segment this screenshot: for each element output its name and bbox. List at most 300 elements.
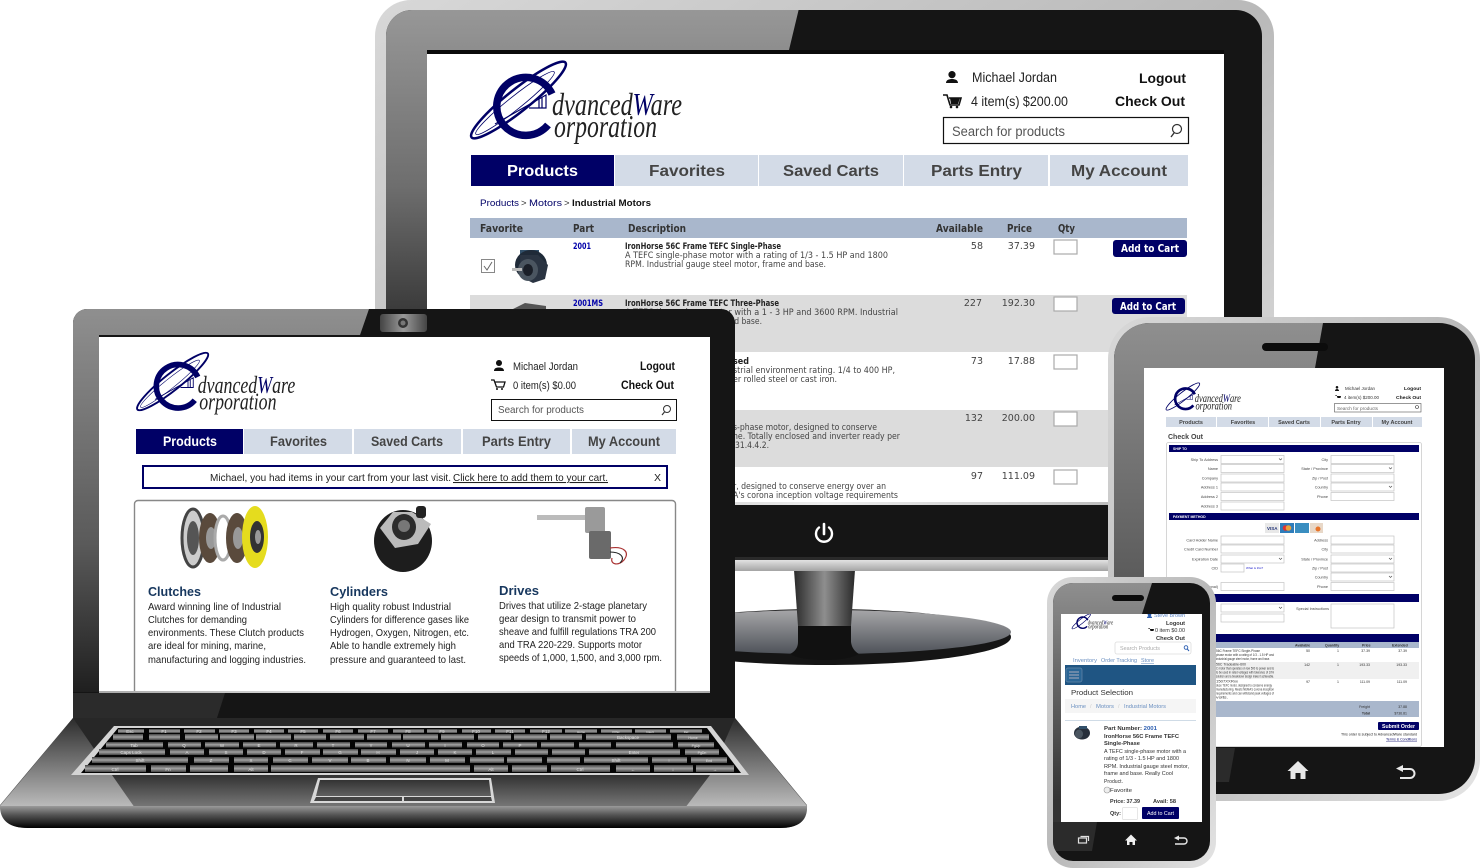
laptop base [0, 718, 807, 828]
product table: Price [1007, 223, 1032, 235]
key labels: F3 [231, 729, 237, 734]
section links: Order Tracking [1101, 658, 1137, 664]
breadcrumb: Motors [529, 198, 562, 209]
tablet [1108, 317, 1480, 801]
user account block: Check Out [1115, 93, 1185, 109]
form inputs [1221, 456, 1394, 628]
cylinder photo [374, 506, 432, 572]
order summary table: 37.39 [1361, 649, 1370, 653]
user account block [1335, 386, 1422, 400]
order summary table: 56C Frame TEFC Single-Phase [1216, 649, 1260, 653]
key labels: L [492, 750, 495, 755]
navigation tabs [1166, 417, 1422, 427]
order summary table: 1 [1337, 649, 1339, 653]
key labels: I [444, 743, 446, 748]
product table: s-phase motor, designed to conserve [733, 423, 877, 433]
order summary table: 1507XXRxx [1216, 680, 1238, 684]
category text: Drives that utilize 2-stage planetary [499, 600, 648, 612]
terms text: Terms & Conditions [1386, 738, 1417, 742]
key labels: F7 [370, 729, 376, 734]
key labels: PgDn [698, 751, 706, 755]
search box: Search for products [498, 404, 584, 416]
user account block: Logout [640, 361, 675, 373]
order summary table: Freight [1359, 705, 1370, 709]
product table: 31.4.4.2. [735, 441, 769, 451]
product table [470, 218, 1187, 501]
phone [1047, 577, 1216, 868]
navigation tabs: My Account [1071, 163, 1168, 180]
navigation tabs: Saved Carts [783, 163, 879, 180]
product table: r, designed to conserve energy over an [733, 482, 886, 492]
checkout form panel: PAYMENT METHOD [1173, 515, 1206, 519]
monitor frame [375, 0, 1274, 571]
product details: Favorite [1110, 788, 1132, 794]
category text: manufacturing and logging industries. [148, 654, 306, 666]
logo [132, 347, 296, 416]
clutch photo [182, 506, 268, 568]
icon: phone recent apps [1078, 836, 1088, 843]
product table: 200.00 [1002, 413, 1035, 424]
key labels: PgUp [692, 744, 700, 748]
categories panel [134, 500, 676, 692]
form labels: Company [1202, 476, 1218, 480]
form labels: State / Province [1301, 467, 1328, 471]
breadcrumb [1065, 699, 1196, 713]
breadcrumb: Industrial Motors [572, 198, 651, 209]
key labels: Insert [646, 730, 654, 734]
key labels: Ctrl [112, 767, 118, 772]
credit card icons [1265, 523, 1323, 533]
form labels: Special Instructions [1296, 607, 1329, 611]
product selection heading: Product Selection [1071, 688, 1133, 697]
breadcrumb: / [1118, 704, 1120, 710]
category text: Cylinders [330, 584, 388, 599]
key labels: F [301, 750, 304, 755]
search box [492, 400, 676, 420]
key labels: F8 [405, 729, 411, 734]
screen bottom highlight [427, 502, 1224, 505]
form labels: Country [1315, 486, 1328, 490]
order summary table: industrial gauge steel motor, frame and base. [1216, 657, 1270, 661]
checkout heading: Check Out [1168, 434, 1204, 441]
key labels: End [706, 759, 712, 763]
cart reminder alert: Click here to add them to your cart. [453, 472, 608, 484]
key labels: F6 [335, 729, 341, 734]
order summary table: Extended [1392, 644, 1408, 648]
form labels: State / Province [1301, 558, 1328, 562]
user account block: Steve Brown [1154, 613, 1185, 619]
quantity inputs [1054, 240, 1077, 484]
category text: and TRA 220-229. Supports motor [499, 639, 642, 651]
navigation tabs [136, 429, 676, 454]
terms text [1341, 732, 1417, 742]
product table: Qty [1058, 223, 1075, 235]
drive photo [537, 507, 626, 564]
icon: phone home [1125, 834, 1137, 845]
category text: Hydrogen, Oxygen, Nitrogen, etc. [330, 627, 469, 639]
order summary table: phase motor with a rating of 1/3 - 1.5 HP and [1216, 653, 1274, 657]
add to cart button [1142, 807, 1179, 819]
speaker slot [1262, 343, 1328, 351]
key labels: S [224, 750, 228, 755]
user account block: Check Out [621, 380, 674, 392]
form labels [1184, 458, 1329, 611]
cart reminder alert: X [654, 472, 661, 484]
motor photo [1074, 726, 1090, 740]
category text: sheave and fulfill regulations TRA 200 [499, 626, 656, 638]
order summary table: 56C Tradeable-600 [1216, 662, 1246, 666]
navigation tabs: Saved Carts [371, 433, 443, 449]
category text: gear design to transmit power to [499, 613, 636, 625]
product table: 132 [965, 413, 983, 424]
laptop [0, 309, 807, 828]
user account block: Logout [1166, 621, 1185, 627]
product table: ne. Totally enclosed and inverter ready per [733, 432, 900, 442]
breadcrumb: / [1090, 704, 1092, 710]
navigation tabs: Parts Entry [1331, 420, 1362, 426]
key labels: R [294, 743, 298, 748]
favorite checkbox [482, 260, 494, 272]
monitor [375, 0, 1274, 665]
terms text: This order is subject to AdvancedWare standard [1341, 732, 1417, 736]
product table: gauge steel motor, frame and base. [625, 317, 762, 327]
user account block: Logout [1139, 70, 1186, 86]
form labels: Zip / Post [1312, 566, 1329, 570]
navigation tabs: Products [507, 163, 578, 180]
submit order button [1378, 722, 1419, 730]
key labels: Shift [135, 758, 145, 763]
category text: Award winning line of Industrial [148, 601, 281, 613]
order summary table: 193.33 [1396, 663, 1407, 667]
breadcrumb [480, 198, 651, 209]
product table: 97 [971, 471, 983, 482]
form labels: Address 3 [1201, 504, 1218, 508]
key labels: Tab [130, 743, 138, 748]
key labels: F5 [300, 729, 306, 734]
product details: Part Number: 2001 [1104, 726, 1157, 732]
tablet screen [1144, 368, 1444, 747]
logo: dvancedWare [198, 373, 296, 399]
product table: 192.30 [1002, 298, 1035, 309]
product table: 58 [971, 241, 983, 252]
icon: phone back [1174, 836, 1187, 844]
order summary table: 1 [1337, 680, 1339, 684]
key labels: F9 [439, 729, 445, 734]
phone frame [1047, 577, 1216, 868]
form labels: City [1321, 458, 1328, 462]
form labels: Expiration Date [1192, 558, 1218, 562]
navigation tabs: Favorites [649, 163, 725, 180]
product table: 17.88 [1008, 356, 1035, 367]
order summary table: Available [1295, 644, 1310, 648]
form labels: Card Holder Name [1186, 538, 1218, 542]
add to cart buttons: Add to Cart [1121, 242, 1179, 255]
trackpad [310, 778, 495, 803]
laptop screen [99, 337, 710, 692]
key labels: F1 [161, 729, 167, 734]
logo: orporation [199, 389, 276, 415]
key labels: Alt [248, 767, 254, 772]
key labels: ← [631, 767, 635, 772]
user account block: Logout [1404, 386, 1422, 391]
key labels [112, 729, 717, 772]
form labels: Phone [1317, 585, 1328, 589]
form labels: Credit Card Number [1184, 548, 1219, 552]
order summary table: 37.39 [1398, 649, 1407, 653]
navigation tabs [471, 155, 1188, 186]
search box [944, 118, 1188, 144]
category text: speeds of 1,000, 1,500, and 3,000 rpm. [499, 652, 662, 664]
key labels: Del [684, 730, 689, 734]
order summary table: Price [1362, 644, 1371, 648]
breadcrumb: > [564, 198, 570, 209]
product table: A TEFC single-phase motor with a rating of 1/3 - 1.5 HP and 1800 [625, 251, 888, 261]
key labels: Y [369, 743, 373, 748]
logo [1164, 380, 1241, 413]
keyboard [71, 726, 749, 775]
product table: Part [573, 223, 594, 235]
section bars [1169, 445, 1419, 642]
order summary table: to be used in rated voltages with tolerance of 10% [1216, 670, 1274, 674]
key labels: F10 [472, 729, 480, 734]
user account block: Michael Jordan [972, 70, 1057, 85]
logo: orporation [1088, 624, 1108, 631]
order summary table: requirements and can withstand peak voltages of [1216, 692, 1274, 696]
order summary table: 97 [1306, 680, 1310, 684]
logo [465, 54, 682, 146]
product table: IronHorse 56C Frame TEFC Single-Phase [625, 242, 781, 252]
product table: 2001 [573, 242, 591, 252]
breadcrumb: Products [480, 198, 519, 209]
key labels: N [406, 758, 410, 763]
key labels: Esc [126, 729, 134, 734]
navigation tabs: Parts Entry [931, 163, 1022, 180]
user account block [491, 360, 675, 392]
user account block: Michael Jordan [1345, 386, 1375, 391]
key labels: W [220, 743, 225, 748]
key labels: ↓ [672, 767, 674, 772]
product details: frame and base. Really Cool [1104, 771, 1173, 777]
product details: Qty: [1110, 811, 1121, 817]
monitor stand and base [639, 570, 1011, 665]
form labels: Address 1 [1201, 486, 1218, 490]
key labels: T [332, 743, 335, 748]
key labels: Shift [611, 758, 621, 763]
search box: Search Products [1120, 646, 1160, 652]
form labels: Country [1315, 576, 1328, 580]
category text: Able to handle extremely high [330, 640, 456, 652]
key labels: H [376, 750, 380, 755]
key labels: Z [210, 758, 213, 763]
key labels: Backspace [617, 735, 640, 740]
product details: rating of 1/3 - 1.5 HP and 1800 [1104, 756, 1179, 762]
order summary table: 111.09 [1360, 680, 1370, 684]
category text: High quality robust Industrial [330, 601, 451, 613]
form labels: CID [1211, 566, 1218, 570]
product table: strial environment rating. 1/4 to 400 HP, [733, 366, 895, 376]
navigation tabs: My Account [1382, 420, 1413, 426]
breadcrumb: > [521, 198, 527, 209]
user account block: 0 item $0.00 [1155, 628, 1185, 634]
key labels: Home [688, 736, 698, 740]
product details: IronHorse 56C Frame TEFC [1104, 734, 1179, 740]
key labels: Enter [629, 750, 640, 755]
product table: IronHorse 56C Frame TEFC Three-Phase [625, 299, 779, 309]
product table: 227 [964, 298, 982, 309]
order summary table: 111.09 [1397, 680, 1407, 684]
key labels: K [453, 750, 457, 755]
form labels: Name [1208, 467, 1218, 471]
key labels: M [445, 758, 449, 763]
form labels: Address [1314, 538, 1328, 542]
category text: environments. These Clutch products [148, 627, 304, 639]
navigation tabs: Parts Entry [482, 433, 551, 449]
key labels: F2 [196, 729, 202, 734]
user account block: Check Out [1156, 636, 1185, 642]
key labels: D [262, 750, 266, 755]
monitor screen [427, 54, 1224, 505]
section links [1073, 658, 1154, 664]
category text: are ideal for mining, marine, [148, 640, 266, 652]
product table: A's corona inception voltage requirements [733, 491, 898, 501]
webcam [380, 314, 427, 332]
navigation tabs: Products [1179, 420, 1203, 426]
key labels: F12 [542, 729, 550, 734]
credit card icons: VISA [1267, 526, 1278, 531]
category text: pressure and guaranteed to last. [330, 654, 466, 666]
order summary table: 142 [1304, 663, 1310, 667]
key labels: Alt [488, 767, 494, 772]
breadcrumb: Motors [1096, 704, 1114, 710]
navigation tabs: Favorites [1231, 420, 1255, 426]
order summary table: Total [1362, 712, 1370, 716]
key labels: O [481, 743, 485, 748]
key labels: J [416, 750, 418, 755]
key labels: E [257, 743, 261, 748]
product table: 73 [971, 356, 983, 367]
user account block: 0 item(s) $0.00 [513, 380, 576, 392]
user account block [1147, 614, 1185, 640]
user account block: 4 item(s) $200.00 [1344, 395, 1379, 400]
key labels: PrtSc [612, 730, 620, 734]
form labels: Phone [1317, 495, 1328, 499]
section links: Inventory [1073, 658, 1097, 664]
order summary table: Quantity [1325, 644, 1339, 648]
key labels: Caps Lock [120, 750, 142, 755]
key labels: G [338, 750, 342, 755]
product details: Price: 37.39 [1110, 799, 1140, 805]
checkout form panel [1166, 442, 1422, 746]
product table: Favorite [480, 223, 523, 235]
checkout form panel: SHIP TO [1173, 447, 1187, 451]
user account block: Michael Jordan [513, 361, 578, 373]
order summary table: C motor that operates on low 500 to power and is [1216, 666, 1274, 670]
key labels: A [185, 750, 189, 755]
form labels: Ship To Address [1191, 458, 1218, 462]
key labels: F4 [266, 729, 272, 734]
add to cart buttons: Add to Cart [1120, 300, 1176, 313]
product table: er rolled steel or cast iron. [733, 375, 837, 385]
motor photo [512, 250, 548, 283]
order summary table: 37.88 [1398, 705, 1407, 709]
logo: dvancedWare [1195, 393, 1241, 405]
navigation tabs: Products [163, 433, 217, 449]
key labels: Ctrl [576, 767, 584, 772]
tablet frame [1108, 317, 1480, 801]
order summary table: 1 [1337, 663, 1339, 667]
form labels: Address 2 [1201, 495, 1218, 499]
add to cart button: Add to Cart [1147, 811, 1174, 817]
key labels: → [713, 767, 717, 772]
order summary table: 50 [1306, 649, 1310, 653]
logo: dvancedWare [1088, 619, 1113, 626]
navigation tabs: Saved Carts [1278, 420, 1310, 426]
search box [1115, 642, 1191, 654]
key labels: V [328, 758, 332, 763]
order summary table [1169, 642, 1419, 717]
product table: Description [628, 223, 686, 235]
breadcrumb: Home [1071, 704, 1086, 710]
icon: tablet home [1288, 761, 1308, 779]
breadcrumb: Industrial Motors [1124, 704, 1166, 710]
icon: tablet back [1396, 765, 1414, 778]
section links: Store [1141, 658, 1154, 664]
category text: Cylinders for difference gases like [330, 614, 469, 626]
navigation tabs: Favorites [270, 433, 327, 449]
product table: 37.39 [1008, 241, 1035, 252]
order summary table: manufacturing. Meets NEMA's corona inception [1216, 688, 1274, 692]
power icon [816, 524, 832, 542]
form labels: Phone (Optional) [1189, 585, 1219, 589]
user account block [943, 70, 1186, 109]
product table: Available [936, 223, 983, 235]
category text: Clutches [148, 584, 201, 599]
order summary table: $736.81 [1394, 712, 1407, 716]
key labels: Fn [165, 767, 171, 772]
product table: sed [733, 357, 749, 367]
order summary table: 193.33 [1359, 663, 1370, 667]
checkout form panel: What is this? [1246, 566, 1264, 570]
category text: Drives [499, 583, 539, 598]
key labels: B [366, 758, 370, 763]
search box: Search for products [1337, 406, 1379, 411]
key labels: U [406, 743, 410, 748]
order summary table: solution and a breakdown design make it achievable. [1216, 674, 1274, 678]
product table: 111.09 [1002, 471, 1035, 482]
search box [1334, 404, 1421, 412]
submit order button: Submit Order [1382, 724, 1415, 730]
product table: A TEFC three-phase motor with a 1 - 3 HP and 3600 RPM. Industrial [625, 308, 898, 318]
laptop lid [73, 309, 735, 718]
key labels: F11 [506, 729, 514, 734]
cart reminder alert [143, 466, 667, 488]
category text: Clutches for demanding [148, 614, 247, 626]
user account block: 4 item(s) $200.00 [971, 94, 1068, 109]
key labels: ↑ [668, 758, 670, 763]
add to cart buttons [1112, 240, 1187, 314]
key labels: C [288, 758, 292, 763]
logo [1072, 614, 1114, 630]
cart reminder alert: Michael, you had items in your cart from your last visit. [210, 472, 451, 484]
key labels: X [249, 758, 253, 763]
search box: Search for products [952, 124, 1065, 139]
form labels: Zip / Post [1312, 476, 1329, 480]
product details: A TEFC single-phase motor with a [1104, 749, 1187, 755]
screen bottom highlight [99, 691, 710, 693]
key labels: Q [182, 743, 186, 748]
navigation tabs: My Account [588, 433, 660, 449]
form labels: City [1321, 548, 1328, 552]
